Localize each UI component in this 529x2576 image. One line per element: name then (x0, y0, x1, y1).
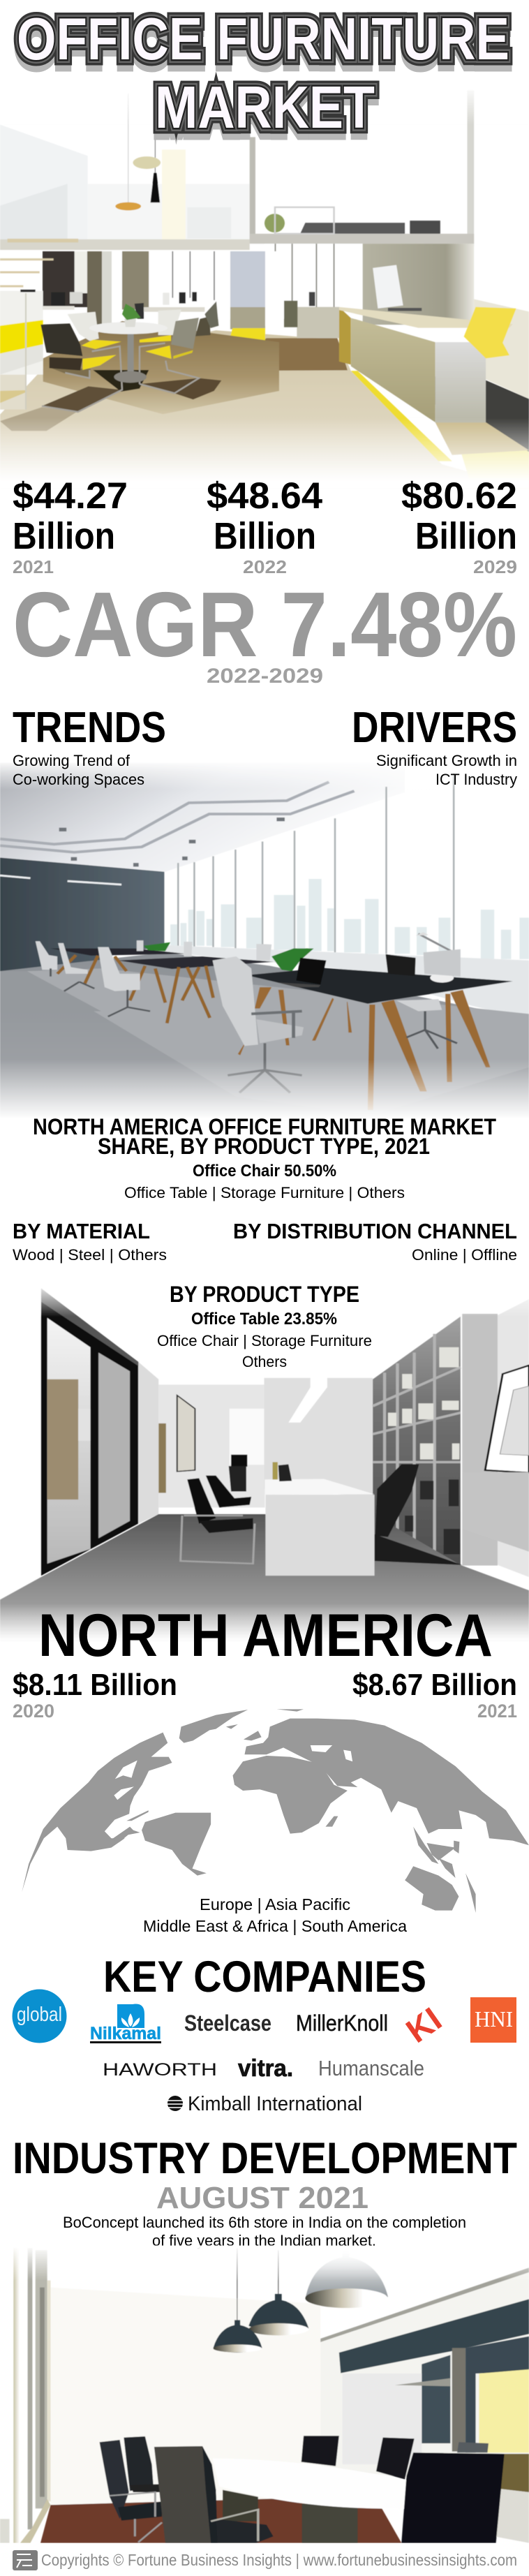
development description: of five years in the Indian market. (152, 2232, 376, 2249)
stat: 2022 market size: Billion (214, 515, 316, 557)
South America (142, 1813, 211, 1876)
by product type: BY PRODUCT TYPE (170, 1282, 359, 1307)
stat: 2020 North America: 2020 (13, 1701, 54, 1722)
logo: Humanscale: Humanscale (318, 2056, 424, 2080)
by material: Wood | Steel | Others (13, 1246, 167, 1264)
stat: 2021 market size: $44.27 (13, 475, 128, 517)
stat: 2022 market size: $48.64 (207, 475, 323, 517)
stat: 2029 market size (401, 475, 517, 577)
market share heading: Office Chair 50.50% (193, 1162, 336, 1180)
white desk (264, 1462, 375, 1576)
far desks with monitors (43, 292, 218, 336)
development description: BoConcept launched its 6th store in India on the completion (63, 2214, 466, 2231)
glass wall and dark teal panels (320, 2267, 529, 2543)
by material (13, 1219, 167, 1264)
title line 2: MARKET: MARKET (155, 75, 375, 141)
logo: Steelcase: Steelcase (184, 2011, 271, 2036)
logo: Fortune Business Insights (13, 2550, 38, 2570)
by distribution channel: BY DISTRIBUTION CHANNEL (233, 1219, 517, 1243)
stat: 2021 North America (352, 1668, 517, 1722)
stat: 2021 North America: 2021 (477, 1701, 517, 1722)
office chair rear (396, 949, 461, 1049)
CAGR headline: 2022-2029 (207, 665, 323, 688)
stat: 2020 North America: $8.11 Billion (13, 1668, 177, 1702)
title line 2: MARKET: MARKET (155, 75, 375, 141)
visitor chairs (181, 1476, 255, 1564)
front left chair (154, 2446, 274, 2543)
logo: Nilkamal (90, 2004, 161, 2043)
Madagascar (325, 1816, 338, 1827)
logo: KI: KI (400, 2001, 449, 2050)
oval table top (213, 2459, 408, 2509)
round table with plant (89, 304, 167, 383)
stat: 2020 North America (13, 1668, 177, 1722)
mezzanine columns and slabs (0, 90, 474, 250)
office chair front (213, 956, 304, 1093)
North America (22, 1733, 172, 1892)
stat: 2021 market size: 2021 (13, 556, 54, 577)
right back wall and windows (264, 244, 529, 399)
other regions list: Europe | Asia Pacific (200, 1895, 350, 1914)
trends: Co-working Spaces (13, 771, 144, 788)
bookshelf (373, 1317, 461, 1565)
wall (51, 2288, 320, 2505)
drivers: ICT Industry (435, 771, 518, 788)
ceiling light fixture (288, 1374, 327, 1423)
upper lounge sofa and plant (264, 207, 440, 234)
dining chairs (40, 309, 199, 412)
development description (63, 2214, 466, 2249)
photo: grey executive office (0, 1282, 529, 1641)
Southeast Asia islands (413, 1827, 476, 1913)
dark feature wall (0, 857, 164, 971)
title line 2: MARKET: MARKET (155, 75, 375, 141)
glass stair panel edge (25, 293, 27, 410)
stat: 2029 market size: $80.62 (401, 475, 517, 517)
reception desk with computer (339, 265, 513, 422)
Eurasia (244, 1719, 529, 1845)
by product type: Office Chair | Storage Furniture (157, 1332, 372, 1349)
by product type: Office Table 23.85% (191, 1310, 337, 1328)
British Isles and Nordic islands (244, 1731, 262, 1740)
photo: yellow and wood open-plan office (0, 84, 529, 489)
stat: 2021 market size: Billion (13, 515, 115, 557)
logo: global: global (17, 2004, 62, 2026)
floor (0, 330, 529, 489)
laptops and desk lamp (276, 932, 459, 987)
yellow chair (464, 307, 516, 358)
drivers: Significant Growth in (376, 752, 517, 769)
Australia (405, 1866, 459, 1911)
boardroom photo bottom mask (0, 2543, 529, 2576)
pendant lamps (115, 94, 161, 210)
partition wall behind desk (264, 1378, 373, 1497)
development date: AUGUST 2021 (156, 2181, 368, 2215)
floor (0, 1514, 529, 1641)
by material: BY MATERIAL (13, 1219, 150, 1243)
by distribution channel: Online | Offline (412, 1246, 517, 1264)
back room (158, 1384, 264, 1507)
right wall with framed picture (462, 1299, 529, 1577)
back wall, columns and windows (43, 251, 279, 341)
floor behind table (43, 321, 279, 414)
main table (238, 968, 513, 1110)
logo: MillerKnoll: MillerKnoll (296, 2011, 388, 2036)
photo: office with dark tables and city windows (0, 760, 529, 1125)
by product type: Others (242, 1353, 287, 1370)
wood floor (40, 2497, 401, 2543)
concrete floor (0, 952, 529, 1118)
logo: vitra: vitra. (238, 2055, 293, 2082)
market share heading (33, 1114, 496, 1201)
Africa (233, 1756, 348, 1834)
left window mullions (0, 2248, 51, 2543)
far right desks (284, 292, 339, 338)
trends: TRENDS (13, 704, 166, 752)
front right chair (401, 2452, 505, 2543)
window wall with skyline (165, 773, 529, 1019)
far chairs (36, 940, 271, 1016)
logo: Nilkamal: Nilkamal (90, 2024, 161, 2043)
stat: 2021 North America: $8.67 Billion (352, 1668, 517, 1702)
back chairs (100, 2436, 489, 2542)
track lights (0, 875, 121, 884)
stat: 2022 market size: 2022 (243, 556, 287, 577)
other regions list (143, 1895, 407, 1935)
by product type (157, 1282, 372, 1370)
logo: Kimball International: Kimball International (188, 2093, 362, 2115)
pendant lamps (214, 2248, 388, 2353)
photo: boardroom with pendant lamps (0, 2246, 529, 2543)
trends: Growing Trend of (13, 752, 131, 769)
left wall with yellow band (0, 260, 54, 410)
drivers (352, 704, 518, 788)
world map (22, 1709, 529, 1913)
market share heading: Office Table | Storage Furniture | Others (124, 1184, 405, 1201)
logo: HNI: HNI (475, 2006, 513, 2031)
logo: HNI (470, 1997, 516, 2043)
stat: 2022 market size (207, 475, 323, 577)
stat: 2029 market size: Billion (415, 515, 517, 557)
logo: HAWORTH: HAWORTH (103, 2060, 217, 2080)
other regions list: Middle East & Africa | South America (143, 1917, 407, 1935)
plants (143, 942, 314, 971)
floor shadows (0, 368, 221, 431)
stat: 2029 market size: 2029 (473, 556, 517, 577)
market share heading: SHARE, BY PRODUCT TYPE, 2021 (98, 1134, 430, 1159)
logo: global (13, 1990, 67, 2043)
key companies heading: KEY COMPANIES (103, 1953, 426, 2001)
Greenland (179, 1710, 248, 1743)
title line 2: MARKET: MARKET (155, 75, 375, 141)
title line 2: MARKET: MARKET (155, 82, 375, 148)
photo edge fades (0, 84, 529, 489)
table pedestals (223, 2490, 357, 2543)
title (17, 6, 509, 148)
trends (13, 704, 166, 788)
far tables (51, 949, 274, 1023)
stat: 2021 market size (13, 475, 128, 577)
dining area and stairs (0, 251, 279, 431)
by distribution channel (233, 1219, 517, 1264)
ceiling coves (0, 782, 355, 865)
glass partition (41, 1289, 158, 1576)
executive chair (375, 1464, 419, 1537)
